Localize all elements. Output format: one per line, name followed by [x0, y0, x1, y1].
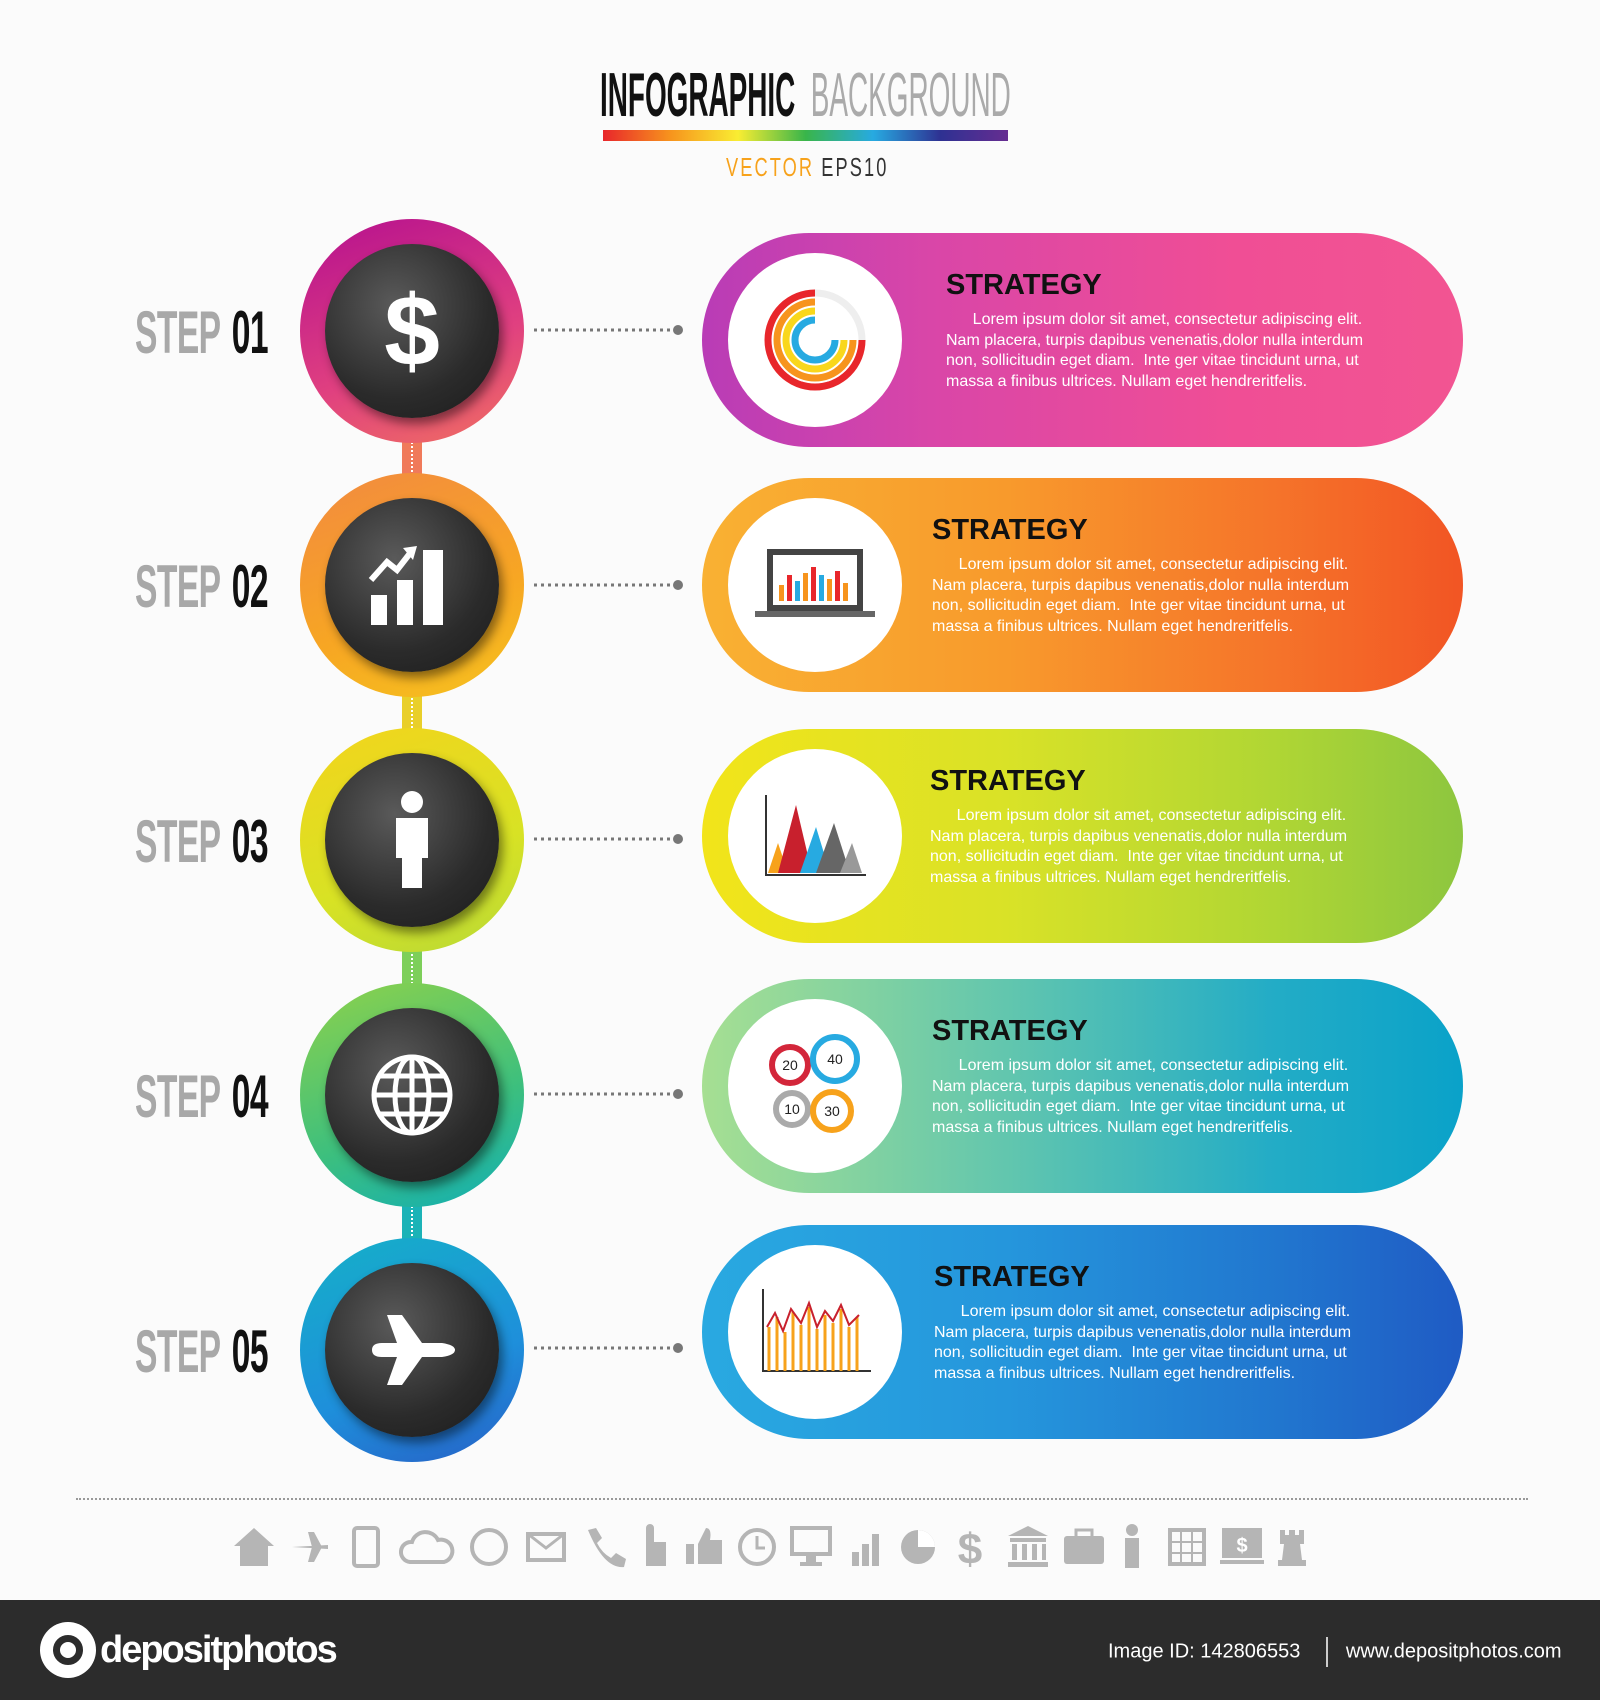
circle 3 person	[300, 728, 524, 952]
panel 2	[702, 478, 1463, 692]
image id: Image ID: 142806553 www.depositphotos.com	[1108, 1640, 1562, 1662]
text 5: STRATEGY	[934, 1261, 1090, 1293]
text 4: Lorem ipsum dolor sit amet, consectetur adipiscing elit. Nam placera, turpis dapibus venenatis,dolor nulla interdum non, sollicitudin eget diam. Inte ger vitae tincidunt urna, ut massa a finibus ultrices. Nullam eget hendreritfelis.	[932, 1057, 1349, 1136]
text 5	[934, 1261, 1351, 1382]
icon: line chart	[728, 1245, 902, 1419]
connector bars	[300, 219, 524, 1462]
panel 5	[702, 1225, 1463, 1439]
text 3	[930, 765, 1347, 886]
circle 4 globe	[300, 983, 524, 1207]
title	[600, 61, 1011, 182]
dotted connectors	[534, 325, 683, 1353]
panel 1	[702, 233, 1463, 447]
title: VECTOR EPS10	[726, 152, 888, 182]
text 4	[932, 1015, 1349, 1136]
circle 1 dollar: $	[384, 274, 440, 386]
panel 3	[702, 729, 1463, 943]
icon: number bubbles: 10	[784, 1101, 800, 1117]
circle 1 dollar	[300, 219, 524, 443]
icon: number bubbles: 40	[827, 1051, 843, 1067]
text 3: Lorem ipsum dolor sit amet, consectetur adipiscing elit. Nam placera, turpis dapibus venenatis,dolor nulla interdum non, sollicitudin eget diam. Inte ger vitae tincidunt urna, ut massa a finibus ultrices. Nullam eget hendreritfelis.	[930, 807, 1347, 886]
text 2: Lorem ipsum dolor sit amet, consectetur adipiscing elit. Nam placera, turpis dapibus venenatis,dolor nulla interdum non, sollicitudin eget diam. Inte ger vitae tincidunt urna, ut massa a finibus ultrices. Nullam eget hendreritfelis.	[932, 556, 1349, 634]
text 2: STRATEGY	[932, 514, 1088, 546]
icon: ring chart	[728, 253, 902, 427]
footer bar	[0, 1600, 1600, 1700]
icon row	[234, 1524, 1306, 1572]
step 4 label: STEP04	[135, 1063, 268, 1130]
text 2	[932, 514, 1349, 634]
circle 2 chart	[300, 473, 524, 697]
title: INFOGRAPHIC BACKGROUND	[600, 61, 1011, 130]
circle 5 plane	[300, 1238, 524, 1462]
icon: number bubbles: 20	[782, 1057, 798, 1073]
text 1	[946, 269, 1363, 390]
step 1 label: STEP01	[135, 299, 268, 366]
logo	[40, 1622, 336, 1678]
text 1: STRATEGY	[946, 269, 1102, 301]
text 5: Lorem ipsum dolor sit amet, consectetur adipiscing elit. Nam placera, turpis dapibus venenatis,dolor nulla interdum non, sollicitudin eget diam. Inte ger vitae tincidunt urna, ut massa a finibus ultrices. Nullam eget hendreritfelis.	[934, 1303, 1351, 1382]
icon: number bubbles: 30	[824, 1103, 840, 1119]
text 3: STRATEGY	[930, 765, 1086, 797]
icon row: $	[1236, 1535, 1248, 1557]
icon: mountain chart	[728, 749, 902, 923]
text 4: STRATEGY	[932, 1015, 1088, 1047]
icon: number bubbles	[728, 999, 902, 1173]
panel 4	[702, 979, 1463, 1193]
logo: depositphotos	[100, 1628, 336, 1670]
icon: laptop chart	[728, 498, 902, 672]
text 1: Lorem ipsum dolor sit amet, consectetur adipiscing elit. Nam placera, turpis dapibus venenatis,dolor nulla interdum non, sollicitudin eget diam. Inte ger vitae tincidunt urna, ut massa a finibus ultrices. Nullam eget hendreritfelis.	[946, 311, 1363, 390]
step 3 label: STEP03	[135, 808, 268, 875]
step 5 label: STEP05	[135, 1318, 268, 1385]
step 2 label: STEP02	[135, 553, 268, 620]
